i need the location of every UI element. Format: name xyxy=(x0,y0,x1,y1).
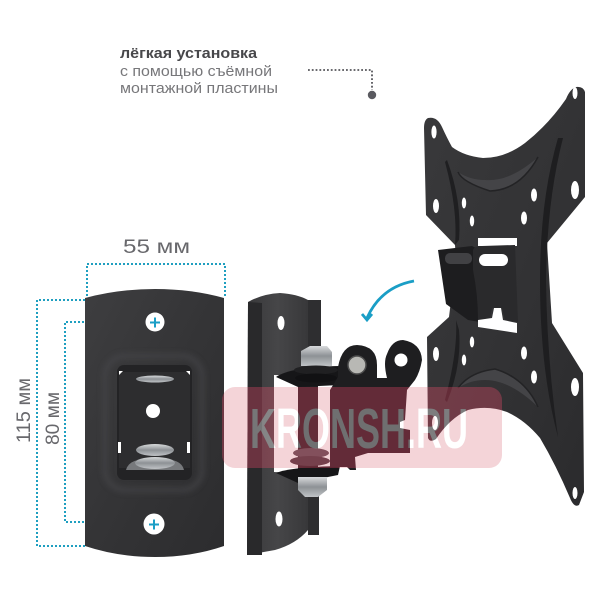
heading: easy installation: лёгкая установка xyxy=(120,46,258,62)
bracket top gap xyxy=(478,238,517,246)
lower arm xyxy=(276,466,340,483)
top mounting hole xyxy=(146,312,164,332)
threaded rod xyxy=(298,372,318,477)
description line 1: с помощью съёмной xyxy=(120,64,272,80)
upper rib xyxy=(458,157,538,191)
lower rib xyxy=(458,369,538,407)
dotted leader line with dot xyxy=(308,70,376,99)
watermark text: KRONSH.RU xyxy=(250,397,468,461)
rear flange xyxy=(308,300,321,535)
bracket front piece xyxy=(473,245,518,322)
description line 2: монтажной пластины xyxy=(120,81,278,97)
dimension: width 55 mm: 55 мм xyxy=(123,237,190,258)
upper arm xyxy=(276,366,340,387)
panel: wall plate front view xyxy=(85,289,224,557)
swivel link arm xyxy=(330,340,422,470)
lower bolt xyxy=(126,460,184,470)
upper bolt xyxy=(136,376,174,382)
watermark tint on dark metal xyxy=(222,387,502,468)
side plate xyxy=(247,293,308,555)
mounting holes xyxy=(431,87,579,499)
dimension: width 55 mm xyxy=(87,237,225,296)
right rib xyxy=(540,138,563,437)
plate outline xyxy=(424,87,585,506)
bracket bottom gap xyxy=(478,308,517,333)
upper nut xyxy=(301,346,332,366)
panel: side view of wall bracket xyxy=(247,293,340,555)
dimension: height 80 mm xyxy=(43,322,84,522)
panel: TV mounting plate xyxy=(424,87,585,506)
dimension: height 80 mm: 80 мм xyxy=(43,392,64,445)
centre hole xyxy=(146,404,160,418)
rotation arrow xyxy=(362,281,414,320)
watermark tint xyxy=(222,387,502,468)
dimension: height 115 mm xyxy=(14,300,85,546)
text block: easy installation xyxy=(120,46,278,97)
bracket slot ribs xyxy=(445,253,472,264)
watermark xyxy=(222,387,502,468)
left rib xyxy=(445,160,460,245)
central bracket xyxy=(438,238,518,333)
bracket rear piece xyxy=(438,246,480,322)
lower washers xyxy=(293,448,329,458)
dimension: height 115 mm: 115 мм xyxy=(14,378,35,443)
bottom mounting hole xyxy=(144,514,164,534)
plate slots xyxy=(278,316,284,330)
plate body xyxy=(85,289,224,557)
window with inner bracket xyxy=(117,365,192,480)
lower nut xyxy=(298,477,327,497)
pressed recess around window xyxy=(105,356,202,490)
